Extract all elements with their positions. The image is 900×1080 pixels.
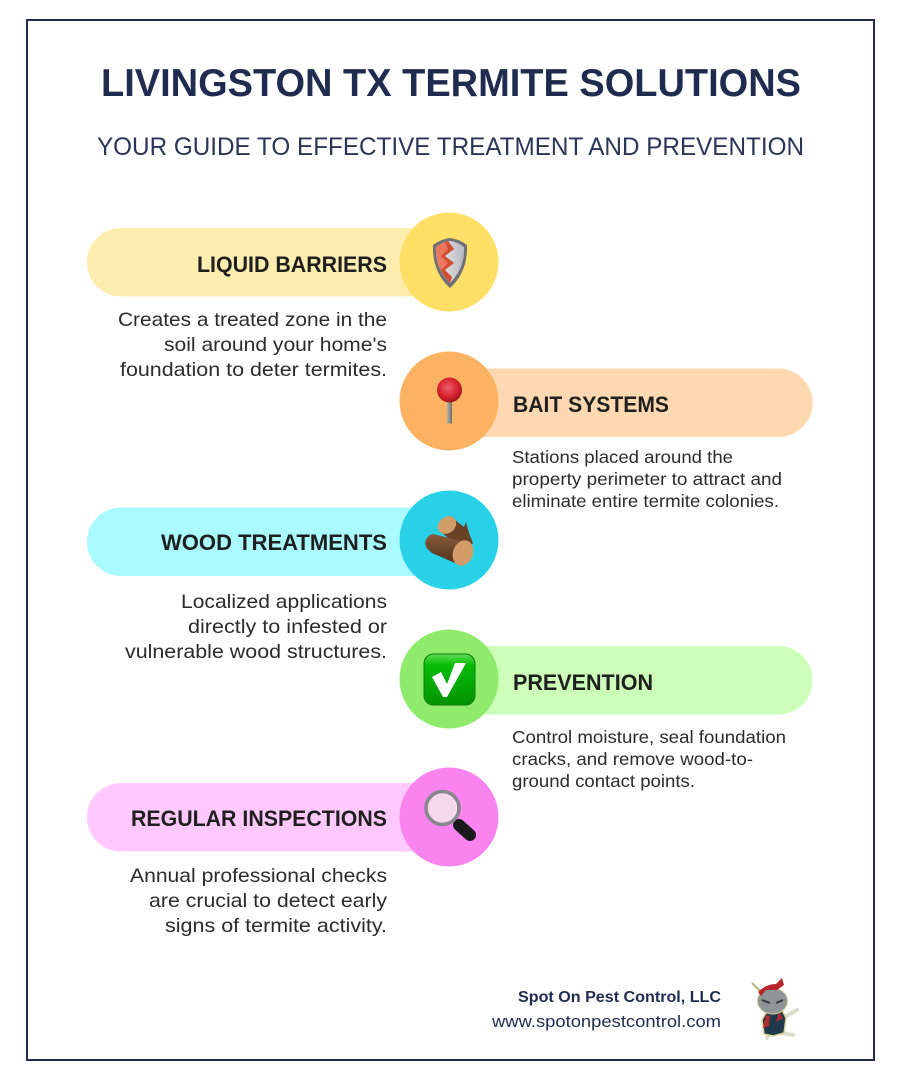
description: wood treatments: vulnerable wood structures. xyxy=(125,641,387,663)
description: bait systems xyxy=(512,447,782,511)
heading: prevention: PREVENTION xyxy=(513,670,653,695)
description: regular inspections xyxy=(130,865,387,937)
heading: liquid barriers: LIQUID BARRIERS xyxy=(197,252,387,277)
description: wood treatments: Localized applications xyxy=(181,591,387,613)
description: bait systems: Stations placed around the xyxy=(512,447,733,467)
icon: logs xyxy=(425,512,477,569)
pill: bait systems xyxy=(442,368,812,437)
description: liquid barriers: Creates a treated zone in the xyxy=(118,309,387,331)
panel: bait systems xyxy=(400,352,812,511)
description: wood treatments xyxy=(125,591,388,663)
description: regular inspections: Annual professional checks xyxy=(130,865,387,887)
description: wood treatments: directly to infested or xyxy=(188,616,388,638)
subtitle: YOUR GUIDE TO EFFECTIVE TREATMENT AND PREVENTION xyxy=(97,133,804,161)
icon: map pin xyxy=(437,378,462,424)
icon: magnifying glass xyxy=(426,792,470,835)
company name: Spot On Pest Control, LLC xyxy=(518,989,721,1006)
icon: mascot logo xyxy=(752,978,797,1038)
description: liquid barriers xyxy=(118,309,387,381)
description: prevention: ground contact points. xyxy=(512,771,695,791)
footer: company xyxy=(491,989,721,1031)
heading: wood treatments: WOOD TREATMENTS xyxy=(161,530,387,555)
description: bait systems: property perimeter to attract and xyxy=(512,469,782,489)
icon circle: wood treatments xyxy=(400,490,498,590)
panel: liquid barriers xyxy=(87,212,498,381)
icon circle: prevention xyxy=(400,630,498,728)
icon circle: bait systems xyxy=(400,352,498,450)
description: liquid barriers: soil around your home's xyxy=(164,334,387,356)
pill: prevention xyxy=(442,646,812,714)
description: bait systems: eliminate entire termite colonies. xyxy=(512,491,779,511)
panel: regular inspections xyxy=(87,768,498,937)
icon: check mark xyxy=(424,654,475,705)
heading: regular inspections: REGULAR INSPECTIONS xyxy=(131,806,387,831)
icon: shield xyxy=(433,238,467,288)
panel: wood treatments xyxy=(87,490,498,663)
description: liquid barriers: foundation to deter termites. xyxy=(120,359,387,381)
title: LIVINGSTON TX TERMITE SOLUTIONS xyxy=(101,62,801,105)
description: prevention xyxy=(512,727,786,791)
heading: bait systems: BAIT SYSTEMS xyxy=(513,392,669,417)
pill: regular inspections xyxy=(87,783,457,852)
description: prevention: cracks, and remove wood-to- xyxy=(512,749,753,769)
description: regular inspections: are crucial to detect early xyxy=(149,890,387,912)
icon circle: regular inspections xyxy=(400,768,498,866)
website: www.spotonpestcontrol.com xyxy=(491,1013,721,1031)
icon circle: liquid barriers xyxy=(400,212,498,312)
pill: liquid barriers xyxy=(87,228,457,296)
panel: prevention xyxy=(400,630,812,791)
description: prevention: Control moisture, seal foundation xyxy=(512,727,786,747)
description: regular inspections: signs of termite activity. xyxy=(165,915,387,937)
pill: wood treatments xyxy=(87,508,457,576)
